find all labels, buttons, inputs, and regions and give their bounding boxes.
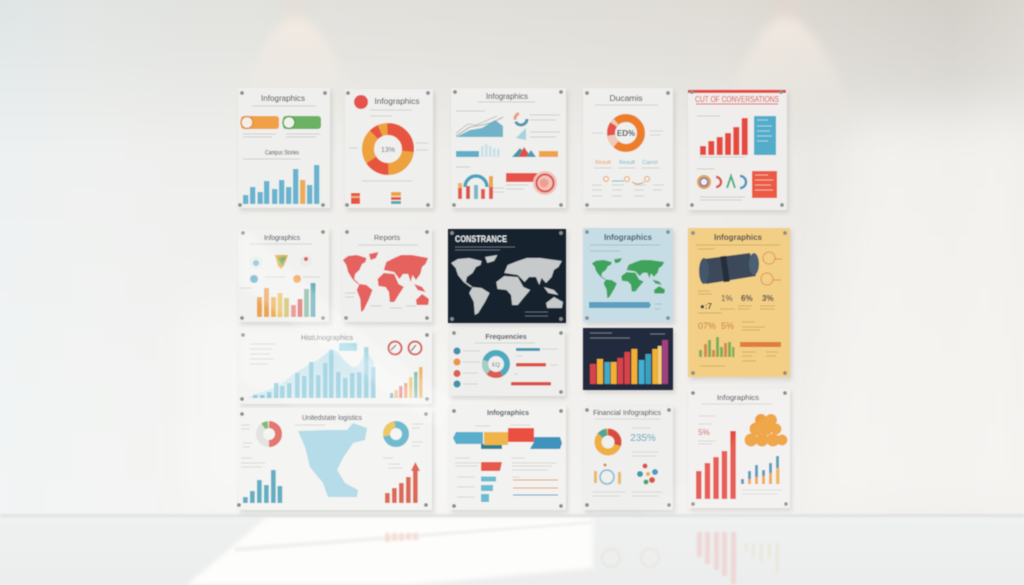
heading: Infographics	[487, 410, 529, 417]
panel: dark multi-colour bar chart	[583, 328, 673, 390]
panel: icons and bars	[238, 228, 329, 322]
red world map	[343, 252, 429, 312]
heading: Reports	[374, 233, 400, 242]
heading: Frequencies	[485, 334, 527, 341]
heading: Infographics	[714, 233, 763, 242]
area chart with bars	[247, 347, 376, 398]
donut value: ED%	[617, 129, 635, 138]
small ring icons	[515, 113, 527, 140]
ceiling spotlight right	[717, 0, 855, 130]
blue bar chart	[243, 470, 282, 503]
subheading: Campus Stories	[265, 150, 299, 156]
panel: mixed charts infographic	[451, 88, 566, 208]
blue tag	[339, 343, 357, 351]
blue region map	[298, 423, 367, 497]
panel reflections on the floor	[385, 532, 778, 584]
floor shadow band	[235, 521, 592, 552]
stat figures	[700, 294, 774, 311]
diagonal sunlight across panels	[238, 230, 800, 515]
reflected red bars	[697, 532, 736, 584]
coloured stat labels: Result	[595, 160, 611, 166]
ring charts	[698, 176, 746, 188]
orange stat figures	[698, 321, 734, 331]
heading underline	[696, 104, 778, 105]
panel: red conversions report	[688, 90, 787, 210]
coloured stat labels: Carrot	[642, 160, 658, 166]
icon cluster left	[594, 464, 621, 484]
reflected chart in light patch	[385, 533, 418, 542]
bar chart	[257, 283, 316, 317]
stat figures: 6%	[741, 294, 753, 303]
panel: regional logistics map	[238, 408, 432, 510]
panel: yellow cylinder infographic	[688, 228, 790, 377]
donut value: EQ	[492, 362, 501, 368]
step tags	[481, 462, 502, 502]
orange band	[740, 342, 781, 347]
green bar chart	[699, 337, 734, 357]
stat figures: ●:7	[700, 302, 712, 311]
reflected small bars	[745, 543, 778, 573]
left donut	[260, 424, 278, 444]
wall light wash	[180, 110, 1024, 517]
green world map	[592, 258, 665, 298]
ceiling spotlight left	[225, 0, 365, 130]
panel: orange donut document	[583, 88, 673, 208]
heading: Infographics	[604, 233, 653, 242]
panel: green world map	[583, 228, 673, 322]
blue progress bar	[589, 302, 651, 308]
panel: horizontal bars with donut	[449, 330, 565, 396]
icon column	[453, 347, 461, 388]
icon row	[250, 255, 312, 283]
red figure: 5%	[698, 428, 710, 437]
icon: coin pile	[744, 414, 788, 446]
bar chart	[243, 165, 319, 204]
heading: HistUnographics	[301, 333, 353, 342]
coloured stat labels	[595, 160, 658, 166]
donut value: 13%	[381, 147, 395, 154]
donut chart	[368, 129, 408, 169]
red bar chart	[696, 431, 736, 499]
donut chart	[611, 118, 641, 148]
progress arrows	[513, 480, 558, 495]
horizontal bars	[511, 348, 551, 386]
ring gauges	[388, 342, 422, 354]
ribbon steps	[453, 428, 562, 449]
icon: cylinder	[699, 253, 759, 284]
wall-floor edge	[0, 514, 1024, 516]
infographic panels	[237, 88, 790, 510]
reflected rings	[602, 549, 659, 567]
row of small icons	[604, 176, 650, 184]
donut chart	[598, 432, 618, 452]
icon cluster right	[637, 464, 658, 484]
floor light patch	[187, 517, 593, 585]
heading: CONSTRANCE	[455, 234, 507, 244]
grey world map	[451, 255, 563, 315]
panel: infographics with campus stories bars	[238, 88, 330, 208]
heading: Infographics	[717, 393, 759, 402]
legend stacks	[351, 192, 401, 204]
red top band	[688, 90, 786, 93]
stacked bar chart	[741, 456, 780, 484]
green callout pill	[283, 116, 321, 129]
orange stat figures: 5%	[721, 321, 734, 331]
colourful bar chart	[390, 367, 422, 398]
panel: red world map	[342, 228, 432, 322]
bar chart	[590, 340, 668, 384]
panel shadows	[240, 91, 792, 513]
panel: red bars with coins	[688, 389, 790, 508]
panel: wide area chart	[238, 330, 432, 404]
triangle chart	[512, 147, 536, 157]
orange callout pill	[241, 116, 279, 129]
heading: Financial Infographics	[593, 410, 662, 417]
arch chart	[458, 176, 493, 199]
heading: Infographics	[261, 93, 305, 103]
heading: Ducamis	[609, 93, 643, 103]
stat figures: 1%	[721, 294, 733, 303]
coloured stat labels: Result	[619, 160, 635, 166]
panel: ribbon infographic	[449, 405, 566, 510]
red ribbon target	[506, 171, 557, 195]
icon: red badge	[354, 95, 368, 109]
sketched circles	[761, 252, 782, 285]
right donut	[386, 424, 406, 444]
panel: dark world map	[448, 229, 566, 323]
donut chart	[485, 353, 507, 375]
area chart	[456, 116, 503, 137]
blue band with bars	[456, 144, 500, 157]
floor	[0, 516, 1024, 585]
panel: financial infographics	[583, 405, 673, 510]
orange stat figures: 07%	[698, 321, 716, 331]
bar chart	[700, 118, 748, 155]
red bar chart with arrow	[385, 462, 420, 503]
heading: CUT OF CONVERSATIONS	[695, 95, 779, 104]
stat figures: 3%	[762, 294, 774, 303]
red info box	[752, 171, 777, 198]
mounting pins	[237, 90, 788, 508]
heading: Infographics	[486, 92, 528, 101]
big figure: 235%	[630, 433, 656, 444]
orange tag	[539, 151, 558, 157]
heading: Infographics	[264, 233, 300, 242]
blue info box	[754, 116, 776, 155]
heading: Infographics	[374, 96, 420, 106]
heading: Unitedstate logistics	[302, 413, 362, 422]
panel: donut infographic	[345, 89, 433, 208]
